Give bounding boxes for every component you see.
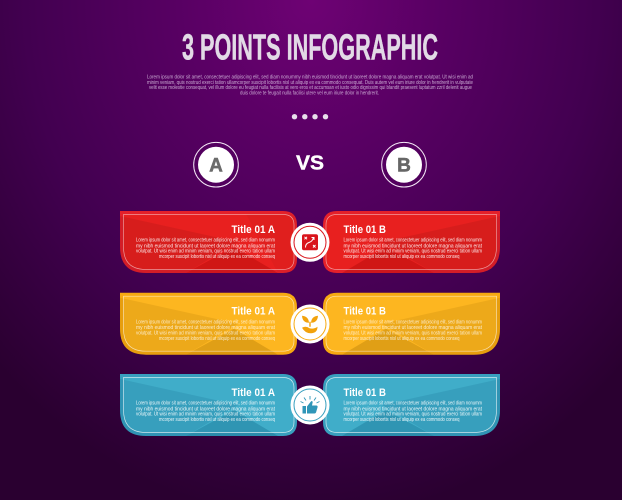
body text A: my nibh euismod tincidunt ut laoreet dolore magna aliquam erat bbox=[136, 325, 276, 331]
row 2: yellow bbox=[120, 293, 500, 355]
panel: blue B bbox=[323, 374, 500, 436]
body text B: my nibh euismod tincidunt ut laoreet dolore magna aliquam erat bbox=[344, 406, 483, 412]
body text B: mcorper suscipit lobortis nisl ut aliquip ex ea commodo conseq bbox=[344, 336, 460, 342]
title B: Title 01 B bbox=[344, 306, 386, 318]
title B: Title 01 B bbox=[344, 224, 386, 236]
body text B bbox=[344, 401, 483, 423]
panel: red A bbox=[120, 211, 297, 273]
panel: yellow B bbox=[323, 293, 500, 355]
dots separator bbox=[292, 114, 328, 119]
body text A: Lorem ipsum dolor sit amet, consectetuer adipiscing elit, sed diam nonumm bbox=[136, 238, 275, 244]
body text A: Lorem ipsum dolor sit amet, consectetuer adipiscing elit, sed diam nonumm bbox=[136, 319, 275, 325]
body text A bbox=[136, 401, 276, 423]
badge B bbox=[382, 142, 426, 187]
panel: blue A bbox=[120, 374, 297, 436]
body text B: mcorper suscipit lobortis nisl ut aliquip ex ea commodo conseq bbox=[344, 254, 460, 260]
icon: strategy board bbox=[290, 223, 330, 262]
body text B bbox=[344, 238, 483, 260]
body text B: Lorem ipsum dolor sit amet, consectetuer adipiscing elit, sed diam nonumm bbox=[344, 319, 482, 325]
body text B: my nibh euismod tincidunt ut laoreet dolore magna aliquam erat bbox=[344, 325, 483, 331]
body text B: Lorem ipsum dolor sit amet, consectetuer adipiscing elit, sed diam nonumm bbox=[344, 401, 482, 407]
icon: plant in hand bbox=[290, 304, 330, 344]
body text B: volutpat. Ut wisi enim ad minim veniam, quis nostrud exerci tation ullam bbox=[344, 330, 482, 336]
panel: yellow A bbox=[120, 293, 297, 355]
body text B: volutpat. Ut wisi enim ad minim veniam, quis nostrud exerci tation ullam bbox=[344, 412, 482, 418]
body text A: volutpat. Ut wisi enim ad minim veniam, quis nostrud exerci tation ullam bbox=[136, 249, 275, 255]
badge A: A bbox=[209, 156, 223, 176]
icon: thumbs up bbox=[290, 386, 330, 424]
body text A: Lorem ipsum dolor sit amet, consectetuer adipiscing elit, sed diam nonumm bbox=[136, 401, 275, 407]
badge B: B bbox=[397, 156, 411, 176]
body text A: my nibh euismod tincidunt ut laoreet dolore magna aliquam erat bbox=[136, 243, 276, 249]
intro text block: Lorem ipsum dolor sit amet, consectetuer adipiscing elit, sed diam nonummy nibh euismod tincidunt ut laoreet dolore magna aliquam erat volutpat. Ut wisi enim ad bbox=[147, 74, 473, 80]
body text A: mcorper suscipit lobortis nisl ut aliquip ex ea commodo conseq bbox=[159, 254, 275, 260]
body text A: mcorper suscipit lobortis nisl ut aliquip ex ea commodo conseq bbox=[159, 417, 275, 423]
body text A: volutpat. Ut wisi enim ad minim veniam, quis nostrud exerci tation ullam bbox=[136, 330, 275, 336]
body text A: mcorper suscipit lobortis nisl ut aliquip ex ea commodo conseq bbox=[159, 336, 275, 342]
title A: Title 01 A bbox=[232, 387, 275, 399]
intro text block: duis dolore te feugait nulla facilisi utere vel eum iriure dolor in hendrerit. bbox=[240, 90, 379, 96]
intro text block: velit esse molestie consequat, vel illum dolore eu feugiat nulla facilisis at vero eros et accumsan et iusto odio dignissim qui blandit praesent luptatum zzril delenit augue bbox=[149, 85, 472, 91]
body text A bbox=[136, 238, 276, 260]
title B: Title 01 B bbox=[344, 387, 386, 399]
intro text block bbox=[147, 74, 473, 96]
row 3: blue bbox=[120, 374, 500, 436]
badge A bbox=[194, 142, 238, 187]
body text A: my nibh euismod tincidunt ut laoreet dolore magna aliquam erat bbox=[136, 406, 276, 412]
body text B: Lorem ipsum dolor sit amet, consectetuer adipiscing elit, sed diam nonumm bbox=[344, 238, 482, 244]
intro text block: minim veniam, quis nostrud exerci tation ullamcorper suscipit lobortis nisl ut aliquip ex ea commodo consequat. Duis autem vel eum iriure dolor in hendrerit in vulputate bbox=[147, 80, 473, 86]
panel: red B bbox=[323, 211, 500, 273]
title: 3 POINTS INFOGRAPHIC bbox=[182, 26, 438, 68]
row 1: red bbox=[120, 211, 500, 273]
body text B: my nibh euismod tincidunt ut laoreet dolore magna aliquam erat bbox=[344, 243, 483, 249]
body text A bbox=[136, 319, 276, 342]
body text B: mcorper suscipit lobortis nisl ut aliquip ex ea commodo conseq bbox=[344, 417, 460, 423]
title A: Title 01 A bbox=[232, 224, 275, 236]
VS label: VS bbox=[296, 152, 324, 174]
body text A: volutpat. Ut wisi enim ad minim veniam, quis nostrud exerci tation ullam bbox=[136, 412, 275, 418]
title A: Title 01 A bbox=[232, 306, 275, 318]
body text B: volutpat. Ut wisi enim ad minim veniam, quis nostrud exerci tation ullam bbox=[344, 249, 482, 255]
body text B bbox=[344, 319, 483, 342]
